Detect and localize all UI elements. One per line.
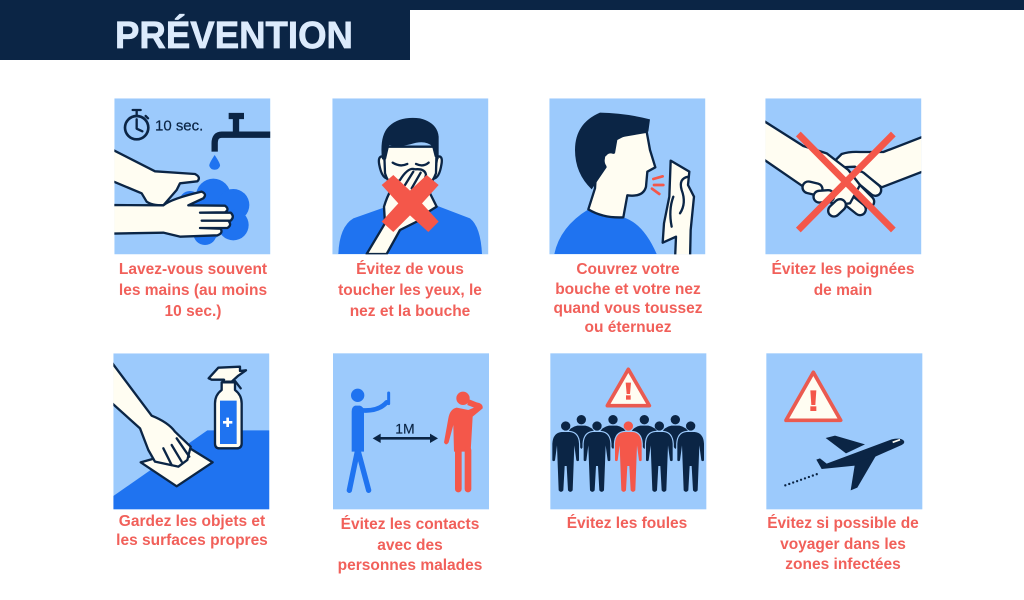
icon: ear — [604, 153, 613, 166]
caption 8: voyager dans les — [780, 536, 906, 553]
icon: upper hand — [114, 149, 200, 204]
icon: red cross — [798, 134, 893, 230]
icon: cough marks — [652, 176, 663, 194]
icon: hair — [575, 113, 650, 189]
icon: left fingers — [808, 187, 840, 211]
icon: finger lines — [163, 438, 189, 465]
icon: ears — [379, 156, 442, 179]
caption 5: Gardez les objets et — [119, 513, 265, 530]
caption 5: les surfaces propres — [116, 532, 268, 549]
highlighted red person — [615, 421, 642, 492]
back row of people — [567, 415, 689, 449]
icon: cloth — [141, 448, 213, 486]
panel: wash hands — [107, 98, 270, 254]
icon: closed eyes — [393, 163, 429, 165]
caption 3: bouche et votre nez — [555, 281, 701, 298]
icon: hand — [113, 362, 192, 468]
icon: hair — [381, 118, 439, 159]
panel: avoid crowds — [550, 353, 706, 509]
icon: red person — [444, 392, 483, 489]
caption 6: avec des — [377, 537, 443, 554]
icon: water drop — [209, 155, 220, 170]
icon: tissue fold — [670, 177, 688, 227]
title: PRÉVENTION — [115, 13, 353, 57]
caption 8: Évitez si possible de — [767, 515, 919, 532]
caption 1: Lavez-vous souvent — [119, 261, 267, 278]
icon: tissue and hand — [663, 161, 694, 260]
icon: lower hand — [107, 192, 233, 237]
icon: shirt — [554, 209, 657, 254]
icon: stopwatch — [125, 110, 148, 139]
caption 3: Couvrez votre — [576, 261, 680, 278]
front row of people — [552, 421, 704, 492]
icon: dotted flight path — [785, 474, 817, 485]
caption 4: de main — [814, 282, 872, 299]
panel: avoid travel — [766, 353, 922, 509]
panel: clean surfaces — [107, 353, 269, 509]
icon: right fingers — [848, 177, 875, 209]
panel: do not touch face — [332, 98, 488, 254]
icon: warning triangle — [607, 369, 649, 406]
caption 3: ou éternuez — [585, 319, 672, 336]
icon: soap foam — [179, 179, 249, 245]
header band — [0, 0, 1024, 60]
caption 2: Évitez de vous — [356, 261, 464, 278]
caption 7: Évitez les foules — [567, 515, 687, 532]
icon: warning triangle — [786, 372, 841, 420]
icon: head and neck — [588, 132, 655, 217]
icon: plane — [816, 436, 904, 490]
icon: left arm and hand — [759, 118, 860, 205]
icon: red cross — [382, 175, 439, 232]
caption 6: Évitez les contacts — [341, 516, 479, 533]
icon: table — [113, 430, 269, 509]
icon: shirt — [338, 205, 482, 254]
caption 6: personnes malades — [338, 557, 482, 574]
icon: spray bottle — [209, 367, 246, 448]
icon: face — [383, 146, 438, 181]
icon: neck — [422, 193, 438, 212]
caption 3: quand vous toussez — [554, 300, 703, 317]
distance arrow — [373, 434, 438, 443]
panel: no handshake — [759, 98, 928, 254]
caption 2: toucher les yeux, le — [338, 282, 482, 299]
panel: cover cough — [549, 98, 705, 260]
caption 1: 10 sec.) — [165, 303, 221, 320]
caption 4: Évitez les poignées — [772, 261, 914, 278]
icon: right arm and hand — [836, 136, 922, 188]
icon: hand on face — [367, 169, 430, 254]
panel: keep distance — [333, 353, 489, 509]
icon: tap — [215, 116, 270, 152]
distance label: 1M — [395, 420, 415, 436]
icon: blue person — [349, 389, 389, 490]
icon: finger lines — [405, 172, 421, 188]
caption 1: les mains (au moins — [119, 282, 267, 299]
caption 2: nez et la bouche — [350, 303, 471, 320]
stopwatch label: 10 sec. — [155, 118, 203, 135]
caption 8: zones infectées — [785, 556, 901, 573]
